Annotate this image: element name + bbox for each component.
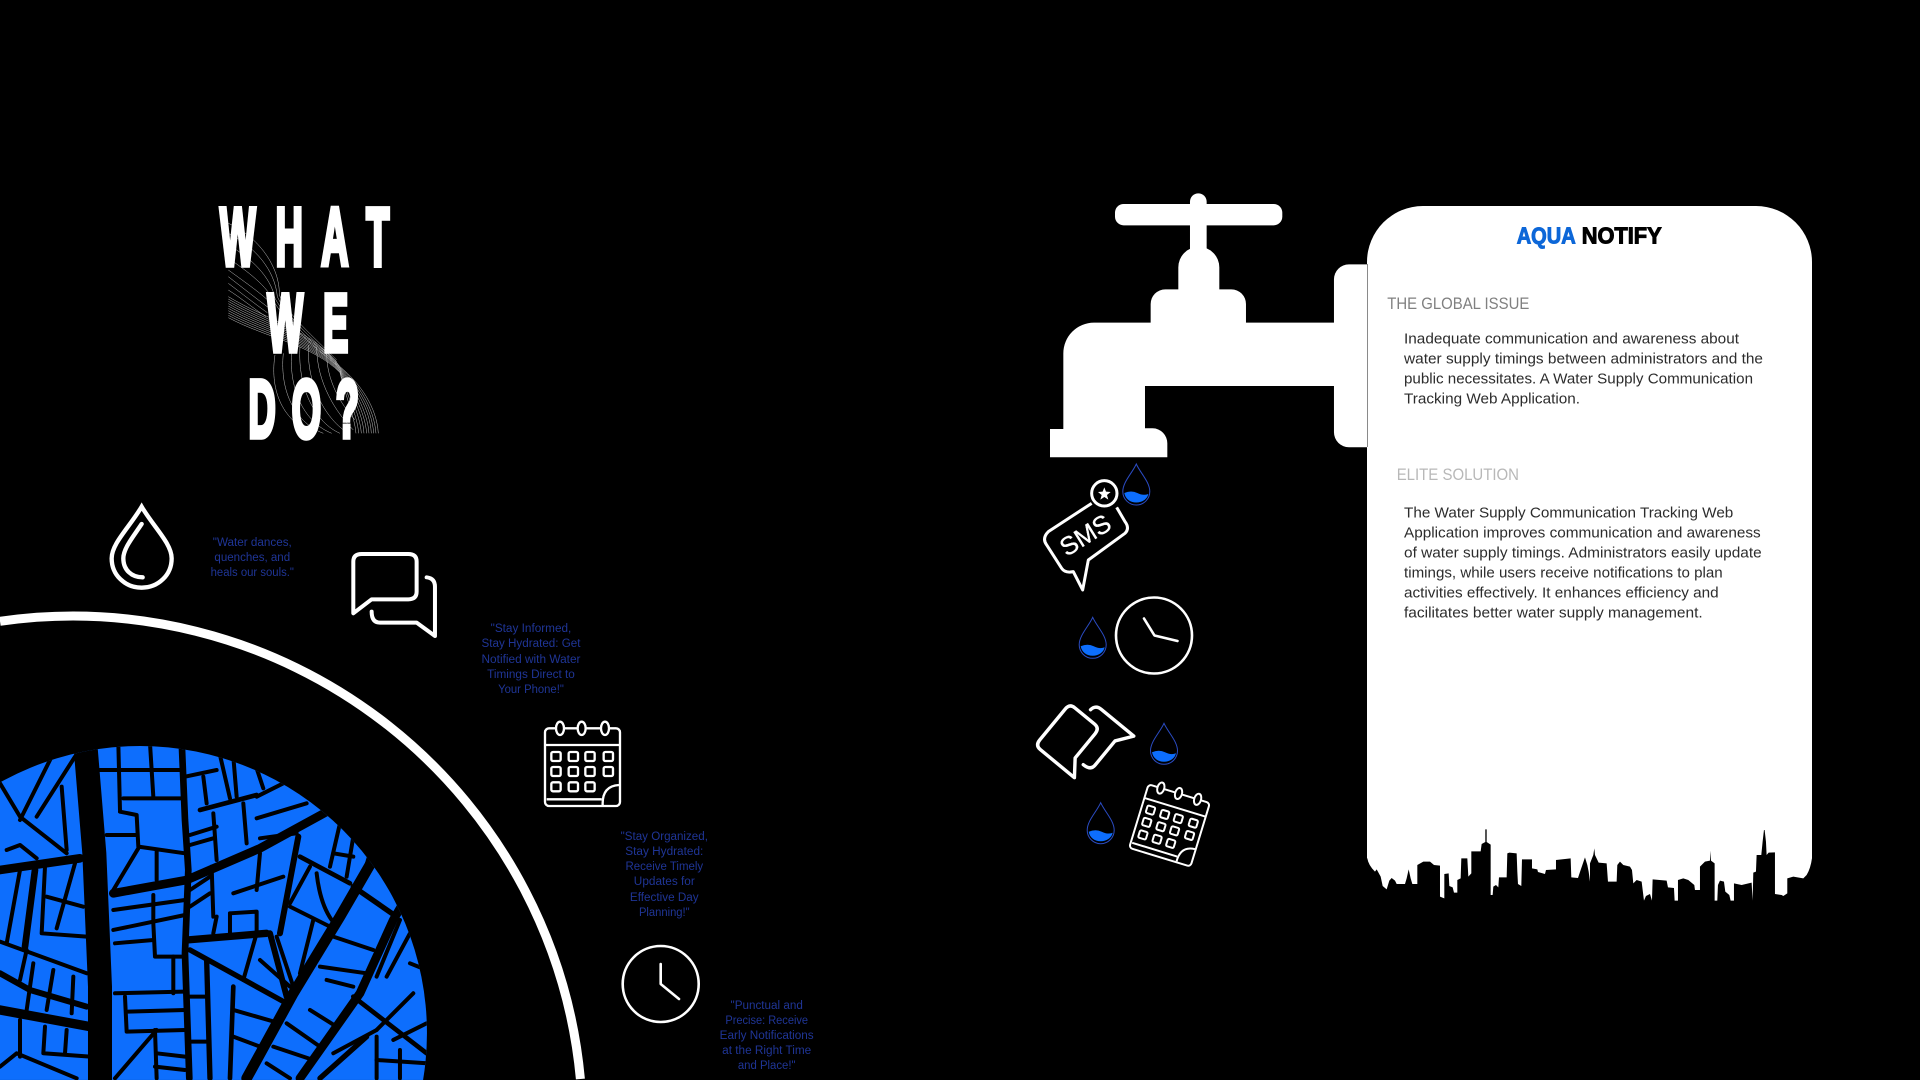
text: elite solution body: timings, while users receive notifications to plan xyxy=(1404,564,1723,581)
city skyline silhouette xyxy=(1360,829,1827,943)
icon: calendar xyxy=(545,722,620,806)
caption: stay organized: Stay Hydrated: xyxy=(625,846,703,858)
text: elite solution body: facilitates better water supply management. xyxy=(1404,604,1703,621)
caption: punctual and precise: at the Right Time xyxy=(722,1045,811,1057)
icon: falling drop 1 xyxy=(1123,464,1150,505)
icon: clock xyxy=(623,946,699,1022)
decorative wave lines behind title xyxy=(228,223,378,433)
text: global issue body: Inadequate communication and awareness about xyxy=(1404,330,1740,347)
heading: elite solution: ELITE SOLUTION xyxy=(1397,466,1519,484)
caption: punctual and precise xyxy=(720,1000,814,1072)
caption: stay informed: Notified with Water xyxy=(482,654,581,666)
caption: stay organized: "Stay Organized, xyxy=(621,831,708,843)
caption: water dances: quenches, and xyxy=(214,552,290,564)
icon: falling drop 4 xyxy=(1087,803,1114,844)
icon: falling drop 2 xyxy=(1079,617,1106,658)
text: global issue body xyxy=(1403,330,1763,407)
caption: stay organized: Updates for xyxy=(634,876,695,888)
brand title: aqua notify: AQUA xyxy=(1517,222,1576,248)
caption: water dances: "Water dances, xyxy=(213,537,292,549)
info card xyxy=(1360,206,1827,943)
icon: tilted clock xyxy=(1116,598,1192,674)
caption: punctual and precise: and Place!" xyxy=(738,1060,796,1072)
title: what we do xyxy=(220,190,389,455)
caption: punctual and precise: Precise: Receive xyxy=(725,1015,808,1027)
text: elite solution body: of water supply timings. Administrators easily update xyxy=(1404,544,1762,561)
text: elite solution body: activities effectively. It enhances efficiency and xyxy=(1404,584,1719,601)
globe outline arc xyxy=(0,616,580,1079)
blue city map globe xyxy=(0,740,440,1080)
caption: stay informed: "Stay Informed, xyxy=(491,623,571,635)
caption: stay organized xyxy=(621,831,708,919)
icon: falling drop 3 xyxy=(1150,723,1178,764)
icon: tilted sms bubble xyxy=(1045,481,1127,590)
icon: tilted chat bubbles xyxy=(1035,692,1134,790)
card panel xyxy=(1367,206,1812,905)
heading: the global issue: THE GLOBAL ISSUE xyxy=(1387,295,1529,313)
caption: stay informed xyxy=(482,623,581,696)
text: global issue body: Tracking Web Application. xyxy=(1404,390,1580,407)
faucet xyxy=(1050,193,1368,457)
icon: chat bubbles xyxy=(353,554,435,636)
caption: stay informed: Your Phone!" xyxy=(498,684,564,696)
icon: tilted calendar xyxy=(1129,779,1212,867)
text: elite solution body: The Water Supply Communication Tracking Web xyxy=(1404,504,1733,521)
caption: stay organized: Planning!" xyxy=(639,907,690,919)
title: what we do: WHAT xyxy=(220,190,389,283)
caption: punctual and precise: Early Notifications xyxy=(720,1030,814,1042)
text: global issue body: public necessitates. A Water Supply Communication xyxy=(1404,370,1753,387)
caption: stay organized: Receive Timely xyxy=(625,861,703,873)
caption: punctual and precise: "Punctual and xyxy=(731,1000,803,1012)
brand title: aqua notify: NOTIFY xyxy=(1582,222,1662,248)
caption: water dances xyxy=(211,537,294,579)
caption: water dances: heals our souls." xyxy=(211,567,294,579)
text: elite solution body: Application improves communication and awareness xyxy=(1404,524,1761,541)
title: what we do: WE xyxy=(268,276,348,369)
title: what we do: DO? xyxy=(248,362,359,455)
caption: stay organized: Effective Day xyxy=(630,892,699,904)
brand title: aqua notify xyxy=(1517,222,1662,248)
icon: tilted sms bubble: SMS xyxy=(1055,509,1116,562)
caption: stay informed: Stay Hydrated: Get xyxy=(482,638,581,650)
icon: water drop xyxy=(112,507,172,588)
card edge hairline xyxy=(1366,264,1368,447)
caption: stay informed: Timings Direct to xyxy=(487,669,575,681)
text: global issue body: water supply timings between administrators and the xyxy=(1403,350,1763,367)
text: elite solution body xyxy=(1404,504,1762,621)
